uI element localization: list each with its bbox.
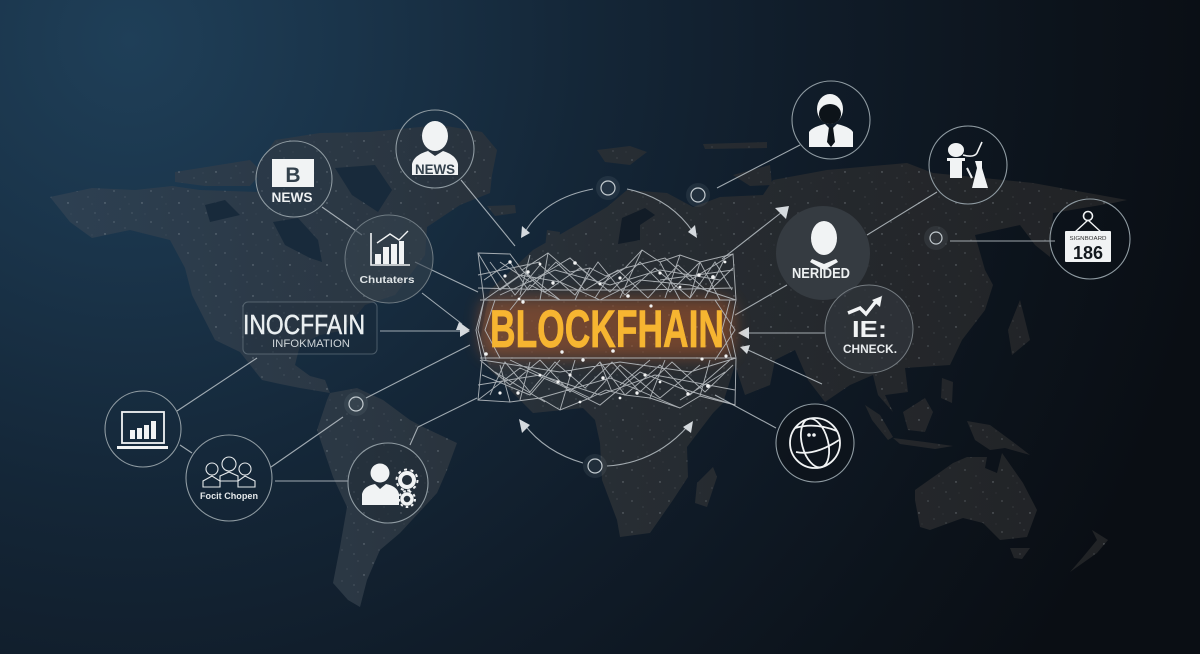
network nodes — [484, 260, 728, 403]
icon: bitcoin news: NEWS — [272, 190, 312, 205]
icon: person with gears — [348, 443, 428, 523]
blockchain glow — [480, 298, 734, 358]
icon: suit person — [792, 81, 870, 159]
blockchain network mesh — [476, 250, 736, 410]
info box: INFOKMATION — [272, 338, 350, 350]
icon: hanging sign 186 — [1050, 199, 1130, 279]
icon: people group — [186, 435, 272, 521]
connector lines — [177, 145, 1055, 481]
icon: hanging sign 186: 186 — [1073, 243, 1103, 263]
icon: globe — [776, 404, 854, 482]
icon: chneck chart — [825, 285, 913, 373]
icon: chneck chart: CHNECK. — [843, 344, 897, 356]
icon: people group: Focit Chopen — [200, 491, 258, 502]
world map — [50, 125, 1127, 607]
icon: bitcoin news: B — [285, 164, 301, 187]
title: blockchain: BLOCKFHAIN — [490, 300, 724, 359]
icon: chart circle — [345, 215, 433, 303]
icon: bitcoin news — [256, 141, 332, 217]
icon: chneck chart: IE: — [852, 316, 887, 342]
icon: nerided person: NERIDED — [792, 266, 850, 282]
small node circles — [344, 176, 948, 478]
info box: INOCFFAIN — [243, 309, 365, 340]
info box — [243, 302, 377, 354]
icon: nerided person — [776, 206, 870, 300]
icon: news person — [396, 110, 474, 188]
arrowheads — [456, 206, 789, 433]
icon: hanging sign 186: SIGNBOARD — [1070, 236, 1107, 242]
icon: news person: NEWS — [415, 162, 455, 177]
icon: laptop chart — [105, 391, 181, 467]
icon: chart circle: Chutaters — [360, 274, 415, 286]
icon: coffee items — [929, 126, 1007, 204]
